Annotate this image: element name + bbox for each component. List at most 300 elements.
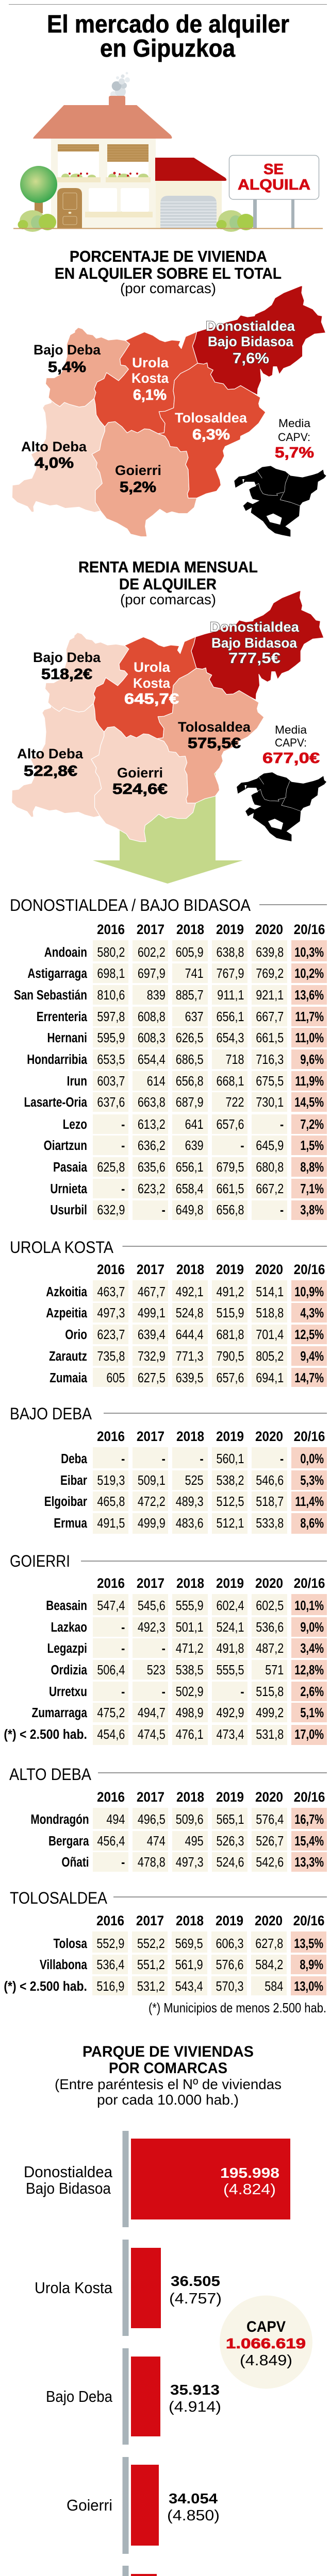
row: Andoain [44, 944, 327, 960]
row: Beasain: Beasain [46, 1598, 87, 1613]
bar: Donostialdea Bajo Bidasoa [24, 2131, 290, 2227]
table header years: 2017 [137, 1576, 164, 1591]
row: Elgoibar: 518,7 [256, 1494, 284, 1510]
row: Zarautz: Zarautz [49, 1349, 87, 1364]
callout: CAPV total [220, 2296, 312, 2388]
row: municipios menores de 2.500 hab. [4, 1726, 327, 1742]
section: Tolosaldea [4, 1889, 327, 1994]
label: Tolosaldea [178, 719, 251, 752]
label: Urola Kosta [124, 659, 179, 707]
row: Orio: 623,7 [97, 1327, 125, 1343]
row: municipios menores de 2.500 hab.: 531,8 [256, 1727, 284, 1742]
row: municipios menores de 2.500 hab.: 13,0% [294, 1978, 323, 1994]
label: Tolosaldea: 575,5€ [188, 735, 241, 752]
row: Legazpi [47, 1640, 327, 1656]
label: Alto Deba: Alto Deba [17, 746, 84, 761]
row: Orio: 639,4 [138, 1327, 166, 1343]
row: Oñati: 542,6 [256, 1855, 284, 1870]
row: Deba: - [200, 1451, 204, 1467]
row: Beasain [46, 1598, 327, 1614]
heading: renta media mensual [78, 558, 258, 607]
section heading: DONOSTIALDEA / BAJO BIDASOA [10, 896, 251, 914]
heading: parque de viviendas: por cada 10.000 hab.) [97, 2092, 239, 2108]
row: Deba: - [280, 1451, 284, 1467]
row: Tolosa [54, 1936, 326, 1952]
bar: Goierri [67, 2457, 220, 2554]
row: Eibar: Eibar [60, 1473, 87, 1488]
row: Villabona: 551,2 [137, 1957, 165, 1973]
row: Eibar: 509,1 [138, 1473, 166, 1488]
label: Tolosaldea: Tolosaldea [178, 719, 251, 735]
row: Mondragón: 496,5 [138, 1812, 166, 1827]
row: Andoain: 580,2 [97, 945, 125, 960]
row: Andoain: 605,9 [176, 945, 204, 960]
row: Elgoibar: 472,2 [138, 1494, 166, 1510]
row: San Sebastián: 911,1 [217, 988, 244, 1003]
row: Usurbil: 649,8 [176, 1202, 204, 1218]
row: Errenteria [37, 1009, 327, 1025]
row: Pasaia: 679,5 [217, 1160, 244, 1175]
label: Donostialdea Bajo Bidasoa: Bajo Bidasoa [208, 334, 294, 349]
bar: Goierri: 34.054 [169, 2490, 218, 2506]
row: Elgoibar [44, 1494, 327, 1510]
row: Lazkao: 9,0% [300, 1619, 324, 1635]
row: Zumarraga: 494,7 [138, 1705, 166, 1721]
row: Oñati: 478,8 [138, 1855, 166, 1870]
row: municipios menores de 2.500 hab.: 476,1 [176, 1727, 204, 1742]
row: Zarautz: 790,5 [217, 1349, 244, 1364]
row: Villabona: 561,9 [175, 1957, 203, 1973]
label: Bajo Deba: 5,4% [48, 359, 86, 376]
label: Donostialdea Bajo Bidasoa: 777,5€ [228, 650, 280, 667]
table header years: 2016 [96, 1913, 124, 1928]
bar: Bajo Deba: (4.914) [169, 2399, 221, 2415]
row: Hondarribia: 686,5 [176, 1052, 204, 1067]
table header years: 2017 [137, 1790, 164, 1805]
row: Hondarribia: 654,4 [138, 1052, 166, 1067]
row: Urretxu: - [162, 1684, 166, 1700]
row: municipios menores de 2.500 hab.: 516,9 [96, 1979, 124, 1994]
table header years: 20/16 [293, 1913, 324, 1928]
row: Zumaia: 639,5 [176, 1370, 204, 1386]
row: Urretxu: - [240, 1684, 244, 1700]
row: Zumaia: 605 [106, 1370, 125, 1386]
row: Azpeitia: 518,8 [256, 1306, 284, 1321]
row: Ordizia: Ordizia [51, 1663, 88, 1677]
row: Usurbil: - [162, 1202, 166, 1218]
row: Andoain: 602,2 [138, 945, 166, 960]
row: Zumarraga: 5,1% [300, 1705, 324, 1720]
row: Ermua: 533,8 [256, 1516, 284, 1531]
row: Irun: 656,8 [176, 1074, 204, 1089]
row: Ermua: 8,6% [300, 1515, 324, 1531]
row: Azkoitia: 491,2 [217, 1284, 244, 1300]
bar: Goierri: Goierri [67, 2496, 112, 2514]
callout: CAPV total: CAPV [246, 2318, 286, 2335]
row: Eibar: 519,3 [97, 1473, 125, 1488]
row: Eibar: 538,2 [217, 1473, 244, 1488]
row: Mondragón: 494 [106, 1812, 125, 1827]
row: Irun: 675,5 [256, 1074, 284, 1089]
bar chart: parque de viviendas [24, 2131, 290, 2576]
row: Beasain: 602,4 [217, 1598, 244, 1614]
row: Azpeitia: Azpeitia [46, 1306, 88, 1320]
illustration: house for rent: SE [263, 161, 284, 178]
row: Oiartzun: - [240, 1138, 244, 1154]
row: Urnieta: 623,2 [138, 1181, 166, 1197]
row: Beasain: 10,1% [294, 1598, 324, 1613]
heading: parque de viviendas [55, 2043, 282, 2108]
row: Oñati: 497,3 [176, 1855, 204, 1870]
row: Oiartzun [44, 1138, 327, 1154]
table header years: 2016 [97, 1790, 125, 1805]
label: Goierri: 5,2% [120, 479, 156, 496]
table header years: 20/16 [294, 1576, 325, 1591]
row: Lazkao: 501,1 [176, 1620, 204, 1635]
row: Azpeitia: 4,3% [300, 1305, 324, 1320]
row: Lezo: Lezo [63, 1117, 87, 1132]
label: Goierri: Goierri [115, 463, 161, 478]
row: Astigarraga: 10,2% [294, 965, 324, 981]
row: Zumaia: 657,6 [217, 1370, 244, 1386]
row: municipios menores de 2.500 hab.: 473,4 [217, 1727, 244, 1742]
row: Zumarraga: 498,9 [176, 1705, 204, 1721]
row: Lasarte-Oria: 663,8 [138, 1095, 166, 1110]
row: Bergara: 526,7 [256, 1834, 284, 1849]
row: Urretxu: Urretxu [49, 1684, 87, 1699]
row: Oñati: 524,6 [217, 1855, 244, 1870]
row: Tolosa: 627,8 [255, 1936, 283, 1952]
row: Legazpi: 491,8 [217, 1641, 244, 1656]
callout: media CAPV porcentaje: CAPV: [278, 431, 310, 444]
row: Deba [61, 1451, 327, 1467]
row: Oñati: Oñati [61, 1855, 89, 1870]
callout: CAPV total: 1.066.619 [226, 2335, 306, 2351]
row: Urnieta: - [121, 1181, 125, 1197]
row: Astigarraga: 769,2 [256, 966, 284, 981]
row: Hondarribia: 653,5 [97, 1052, 125, 1067]
row: Astigarraga: 698,1 [97, 966, 125, 981]
row: Azkoitia: 463,7 [97, 1284, 125, 1300]
row: Mondragón: Mondragón [30, 1812, 89, 1827]
label: Donostialdea Bajo Bidasoa: Donostialdea [210, 619, 300, 635]
top rule [9, 4, 327, 5]
row: Ermua: 512,1 [217, 1516, 244, 1531]
icon: mini map CAPV [237, 772, 326, 841]
row: Elgoibar: 465,8 [97, 1494, 125, 1510]
row: Orio: 701,4 [256, 1327, 284, 1343]
row: Legazpi: 487,2 [256, 1641, 284, 1656]
row: Usurbil [50, 1202, 327, 1218]
row: Hernani: Hernani [47, 1030, 87, 1045]
row: Azpeitia: 515,9 [217, 1306, 244, 1321]
row: Usurbil: 3,8% [300, 1202, 324, 1217]
section: Bajo Deba [10, 1404, 327, 1531]
label: Tolosaldea: 6,3% [192, 427, 230, 443]
table header years: 2020 [255, 922, 283, 937]
row: Villabona: 576,6 [216, 1957, 244, 1973]
row: Lasarte-Oria: 14,5% [294, 1094, 324, 1110]
row: Astigarraga: 697,9 [138, 966, 166, 981]
row: Legazpi: - [121, 1641, 125, 1656]
row: Zumarraga [32, 1705, 327, 1721]
heading: renta media mensual: DE ALQUILER [119, 575, 217, 593]
row: Irun: 614 [147, 1074, 166, 1089]
row: Errenteria: 608,8 [138, 1009, 166, 1025]
row: Lasarte-Oria [24, 1094, 327, 1110]
row: Azpeitia: 497,3 [97, 1306, 125, 1321]
table header years: 2019 [216, 1913, 243, 1928]
row: Lezo: 7,2% [300, 1116, 324, 1132]
table header years: 2018 [176, 1262, 204, 1277]
row: Irun: Irun [67, 1074, 87, 1089]
row: Lezo: 613,2 [138, 1117, 166, 1132]
table header years: 2016 [97, 1576, 125, 1591]
row: Lezo: 641 [185, 1117, 204, 1132]
label: Urola Kosta: 645,7€ [124, 691, 179, 707]
section heading: ALTO DEBA [9, 1765, 92, 1784]
row: Oiartzun: 639 [185, 1138, 204, 1154]
callout: media CAPV renta: 677,0€ [262, 750, 320, 767]
row: San Sebastián: 13,6% [294, 987, 324, 1003]
row: Mondragón: 509,6 [176, 1812, 204, 1827]
table header years: 2019 [216, 922, 244, 937]
row: Oiartzun: Oiartzun [44, 1138, 87, 1153]
row: Azkoitia: 492,1 [176, 1284, 204, 1300]
row: Legazpi: 471,2 [176, 1641, 204, 1656]
row: Mondragón: 576,4 [256, 1812, 284, 1827]
row: Urretxu: - [121, 1684, 125, 1700]
table header years: 2017 [137, 922, 164, 937]
row: San Sebastián: 810,6 [97, 988, 125, 1003]
row: Usurbil: - [280, 1202, 284, 1218]
row: Hondarribia: 716,3 [256, 1052, 284, 1067]
row: Zumaia: 694,1 [256, 1370, 284, 1386]
row: Hernani: 608,3 [138, 1030, 166, 1046]
table header years: 2017 [137, 1262, 164, 1277]
row: Villabona: Villabona [40, 1957, 88, 1972]
row: Lasarte-Oria: 730,1 [256, 1095, 284, 1110]
row: Ermua: Ermua [54, 1516, 88, 1531]
row: Elgoibar: 512,5 [217, 1494, 244, 1510]
label: Urola Kosta [131, 355, 169, 403]
row: Bergara [48, 1833, 327, 1849]
row: Zumarraga: 475,2 [97, 1705, 125, 1721]
row: Zumarraga: 499,2 [256, 1705, 284, 1721]
row: Elgoibar: Elgoibar [44, 1494, 87, 1509]
callout: media CAPV porcentaje: Media [278, 417, 311, 430]
row: Oñati: 13,3% [294, 1854, 324, 1870]
row: Hernani: 11,0% [295, 1030, 324, 1045]
row: Azkoitia: 467,7 [138, 1284, 166, 1300]
section heading: TOLOSALDEA [10, 1889, 108, 1907]
row: Bergara: 456,4 [97, 1834, 125, 1849]
row: Deba: - [162, 1451, 166, 1467]
row: Mondragón: 565,1 [217, 1812, 244, 1827]
row: Ermua [54, 1515, 327, 1531]
row: Tolosa: 606,3 [216, 1936, 244, 1952]
bar: Bajo Deba: 35.913 [170, 2382, 220, 2398]
label: Alto Deba: 522,8€ [24, 763, 77, 779]
row: Deba: - [121, 1451, 125, 1467]
section heading: GOIERRI [10, 1552, 70, 1570]
table header years: 2016 [97, 1429, 125, 1444]
row: municipios menores de 2.500 hab.: 570,3 [216, 1979, 244, 1994]
section: Alto Deba [9, 1765, 327, 1870]
row: Andoain: 639,8 [256, 945, 284, 960]
row: Pasaia: 635,6 [138, 1160, 166, 1175]
row: Errenteria: 11,7% [295, 1009, 324, 1024]
label: Tolosaldea [175, 410, 248, 443]
section: Goierri [4, 1552, 327, 1742]
row: Ermua: 499,9 [138, 1516, 166, 1531]
callout: media CAPV renta [262, 723, 320, 767]
row: Hernani [47, 1030, 327, 1046]
table header years: 2019 [216, 1429, 244, 1444]
label: Urola Kosta: 6,1% [133, 387, 167, 403]
row: Villabona [40, 1957, 326, 1973]
bar: Urola Kosta [35, 2240, 222, 2336]
row: Irun [67, 1073, 327, 1089]
row: Lazkao: Lazkao [51, 1620, 87, 1635]
table header years: 2019 [216, 1576, 244, 1591]
row: Ordizia: 506,4 [97, 1663, 125, 1678]
row: Azkoitia [46, 1284, 327, 1300]
row: Irun: 668,1 [217, 1074, 244, 1089]
table header years: 2018 [176, 1576, 204, 1591]
row: Azpeitia: 524,8 [176, 1306, 204, 1321]
row: Tolosa: 552,9 [96, 1936, 124, 1952]
section heading: BAJO DEBA [10, 1404, 92, 1423]
row: Errenteria: 667,7 [256, 1009, 284, 1025]
row: municipios menores de 2.500 hab.: (*) < 2.500 hab. [4, 1727, 87, 1742]
row: Bergara: 474 [147, 1834, 166, 1849]
row: San Sebastián: 839 [147, 988, 166, 1003]
label: Alto Deba [17, 746, 84, 779]
row: Pasaia: 656,1 [176, 1160, 204, 1175]
row: Oiartzun: 1,5% [300, 1138, 324, 1153]
row: Elgoibar: 11,4% [295, 1494, 324, 1509]
row: Tolosa: 569,5 [175, 1936, 203, 1952]
title: en Gipuzkoa [100, 35, 235, 62]
row: Tolosa: 13,5% [294, 1936, 323, 1951]
label: Goierri: 524,6€ [112, 781, 168, 798]
row: municipios menores de 2.500 hab.: 543,4 [175, 1979, 203, 1994]
row: Ermua: 491,5 [97, 1516, 125, 1531]
heading: porcentaje de vivienda: (por comarcas) [120, 280, 216, 296]
row: Urnieta: Urnieta [50, 1181, 88, 1196]
bar: Bajo Deba: Bajo Deba [46, 2387, 113, 2405]
bar: Goierri: (4.850) [167, 2507, 220, 2524]
row: San Sebastián: 885,7 [176, 988, 204, 1003]
row: Beasain: 545,6 [138, 1598, 166, 1614]
row: Lasarte-Oria: 722 [226, 1095, 244, 1110]
label: Urola Kosta: Urola [132, 355, 169, 370]
table header years: 20/16 [294, 1262, 325, 1277]
callout: media CAPV renta: CAPV: [275, 736, 307, 749]
heading: renta media mensual: (por comarcas) [120, 591, 216, 607]
row: Elgoibar: 489,3 [176, 1494, 204, 1510]
row: Azkoitia: Azkoitia [46, 1284, 88, 1299]
row: Azkoitia: 10,9% [294, 1284, 324, 1299]
row: Legazpi: 3,4% [300, 1640, 324, 1656]
row: Orio: Orio [65, 1327, 87, 1342]
table header years: 20/16 [294, 1790, 325, 1805]
label: Donostialdea Bajo Bidasoa: Bajo Bidasoa [211, 635, 298, 651]
row: Urnieta: 658,4 [176, 1181, 204, 1197]
table header years: 2020 [255, 1913, 283, 1928]
row: municipios menores de 2.500 hab.: 584 [265, 1979, 283, 1994]
label: Goierri [115, 463, 161, 496]
row: Hondarribia: 718 [226, 1052, 244, 1067]
row: Urretxu: 515,8 [256, 1684, 284, 1700]
callout: media CAPV renta: Media [275, 723, 307, 736]
table header years: 2018 [176, 922, 204, 937]
row: Ordizia: 538,5 [176, 1663, 204, 1678]
bar: Donostialdea Bajo Bidasoa: 195.998 [220, 2165, 279, 2181]
bar: Donostialdea Bajo Bidasoa: (4.824) [223, 2181, 276, 2198]
row: Legazpi: - [162, 1641, 166, 1656]
row: Azkoitia: 514,1 [256, 1284, 284, 1300]
callout: CAPV total: (4.849) [240, 2352, 292, 2369]
bar: Bajo Deba [46, 2348, 221, 2445]
row: Oñati: - [121, 1855, 125, 1870]
row: Oiartzun: - [121, 1138, 125, 1154]
row: Bergara: 495 [185, 1834, 204, 1849]
row: Zarautz: 732,9 [138, 1349, 166, 1364]
row: Tolosa: Tolosa [54, 1936, 88, 1951]
row: Usurbil: 632,9 [97, 1202, 125, 1218]
row: Zumaia: Zumaia [50, 1370, 88, 1385]
row: municipios menores de 2.500 hab. [4, 1978, 326, 1994]
table header years: 2017 [136, 1913, 164, 1928]
bar: Donostialdea Bajo Bidasoa: Donostialdea [24, 2163, 113, 2181]
row: Zarautz: 805,2 [256, 1349, 284, 1364]
row: Oiartzun: 636,2 [138, 1138, 166, 1154]
callout: media CAPV porcentaje [275, 417, 314, 461]
row: San Sebastián [14, 987, 327, 1003]
row: Lasarte-Oria: 687,9 [176, 1095, 204, 1110]
row: Zarautz: 9,4% [300, 1348, 324, 1364]
row: Lazkao: 536,6 [256, 1620, 284, 1635]
row: Urnieta [50, 1181, 327, 1197]
row: Errenteria: 637 [185, 1009, 204, 1025]
row: Ermua: 483,6 [176, 1516, 204, 1531]
heading: porcentaje de vivienda: EN ALQUILER SOBRE EL TOTAL [55, 264, 282, 282]
row: Urretxu: 2,6% [300, 1684, 324, 1699]
row: Orio: 644,4 [176, 1327, 204, 1343]
row: Lezo [63, 1116, 327, 1132]
row: Zumarraga: 492,9 [217, 1705, 244, 1721]
row: Errenteria: 597,8 [97, 1009, 125, 1025]
row: Andoain: 10,3% [294, 944, 324, 960]
illustration: house for rent: ALQUILA [238, 177, 310, 193]
row: Villabona: 8,9% [300, 1957, 323, 1972]
row: Deba: 560,1 [217, 1451, 244, 1467]
row: Bergara: Bergara [48, 1834, 89, 1849]
label: Goierri: Goierri [117, 765, 163, 781]
label: Bajo Deba [34, 342, 101, 376]
map: porcentaje por comarcas [12, 285, 326, 537]
row: Eibar [60, 1472, 327, 1488]
label: Donostialdea Bajo Bidasoa: 7,6% [233, 350, 269, 367]
row: Lasarte-Oria: Lasarte-Oria [24, 1095, 88, 1110]
row: Astigarraga: 767,9 [217, 966, 244, 981]
row: Hernani: 626,5 [176, 1030, 204, 1046]
arrow: green down arrow [93, 773, 243, 884]
row: Pasaia [53, 1159, 327, 1175]
row: Ordizia: 555,5 [217, 1663, 244, 1678]
